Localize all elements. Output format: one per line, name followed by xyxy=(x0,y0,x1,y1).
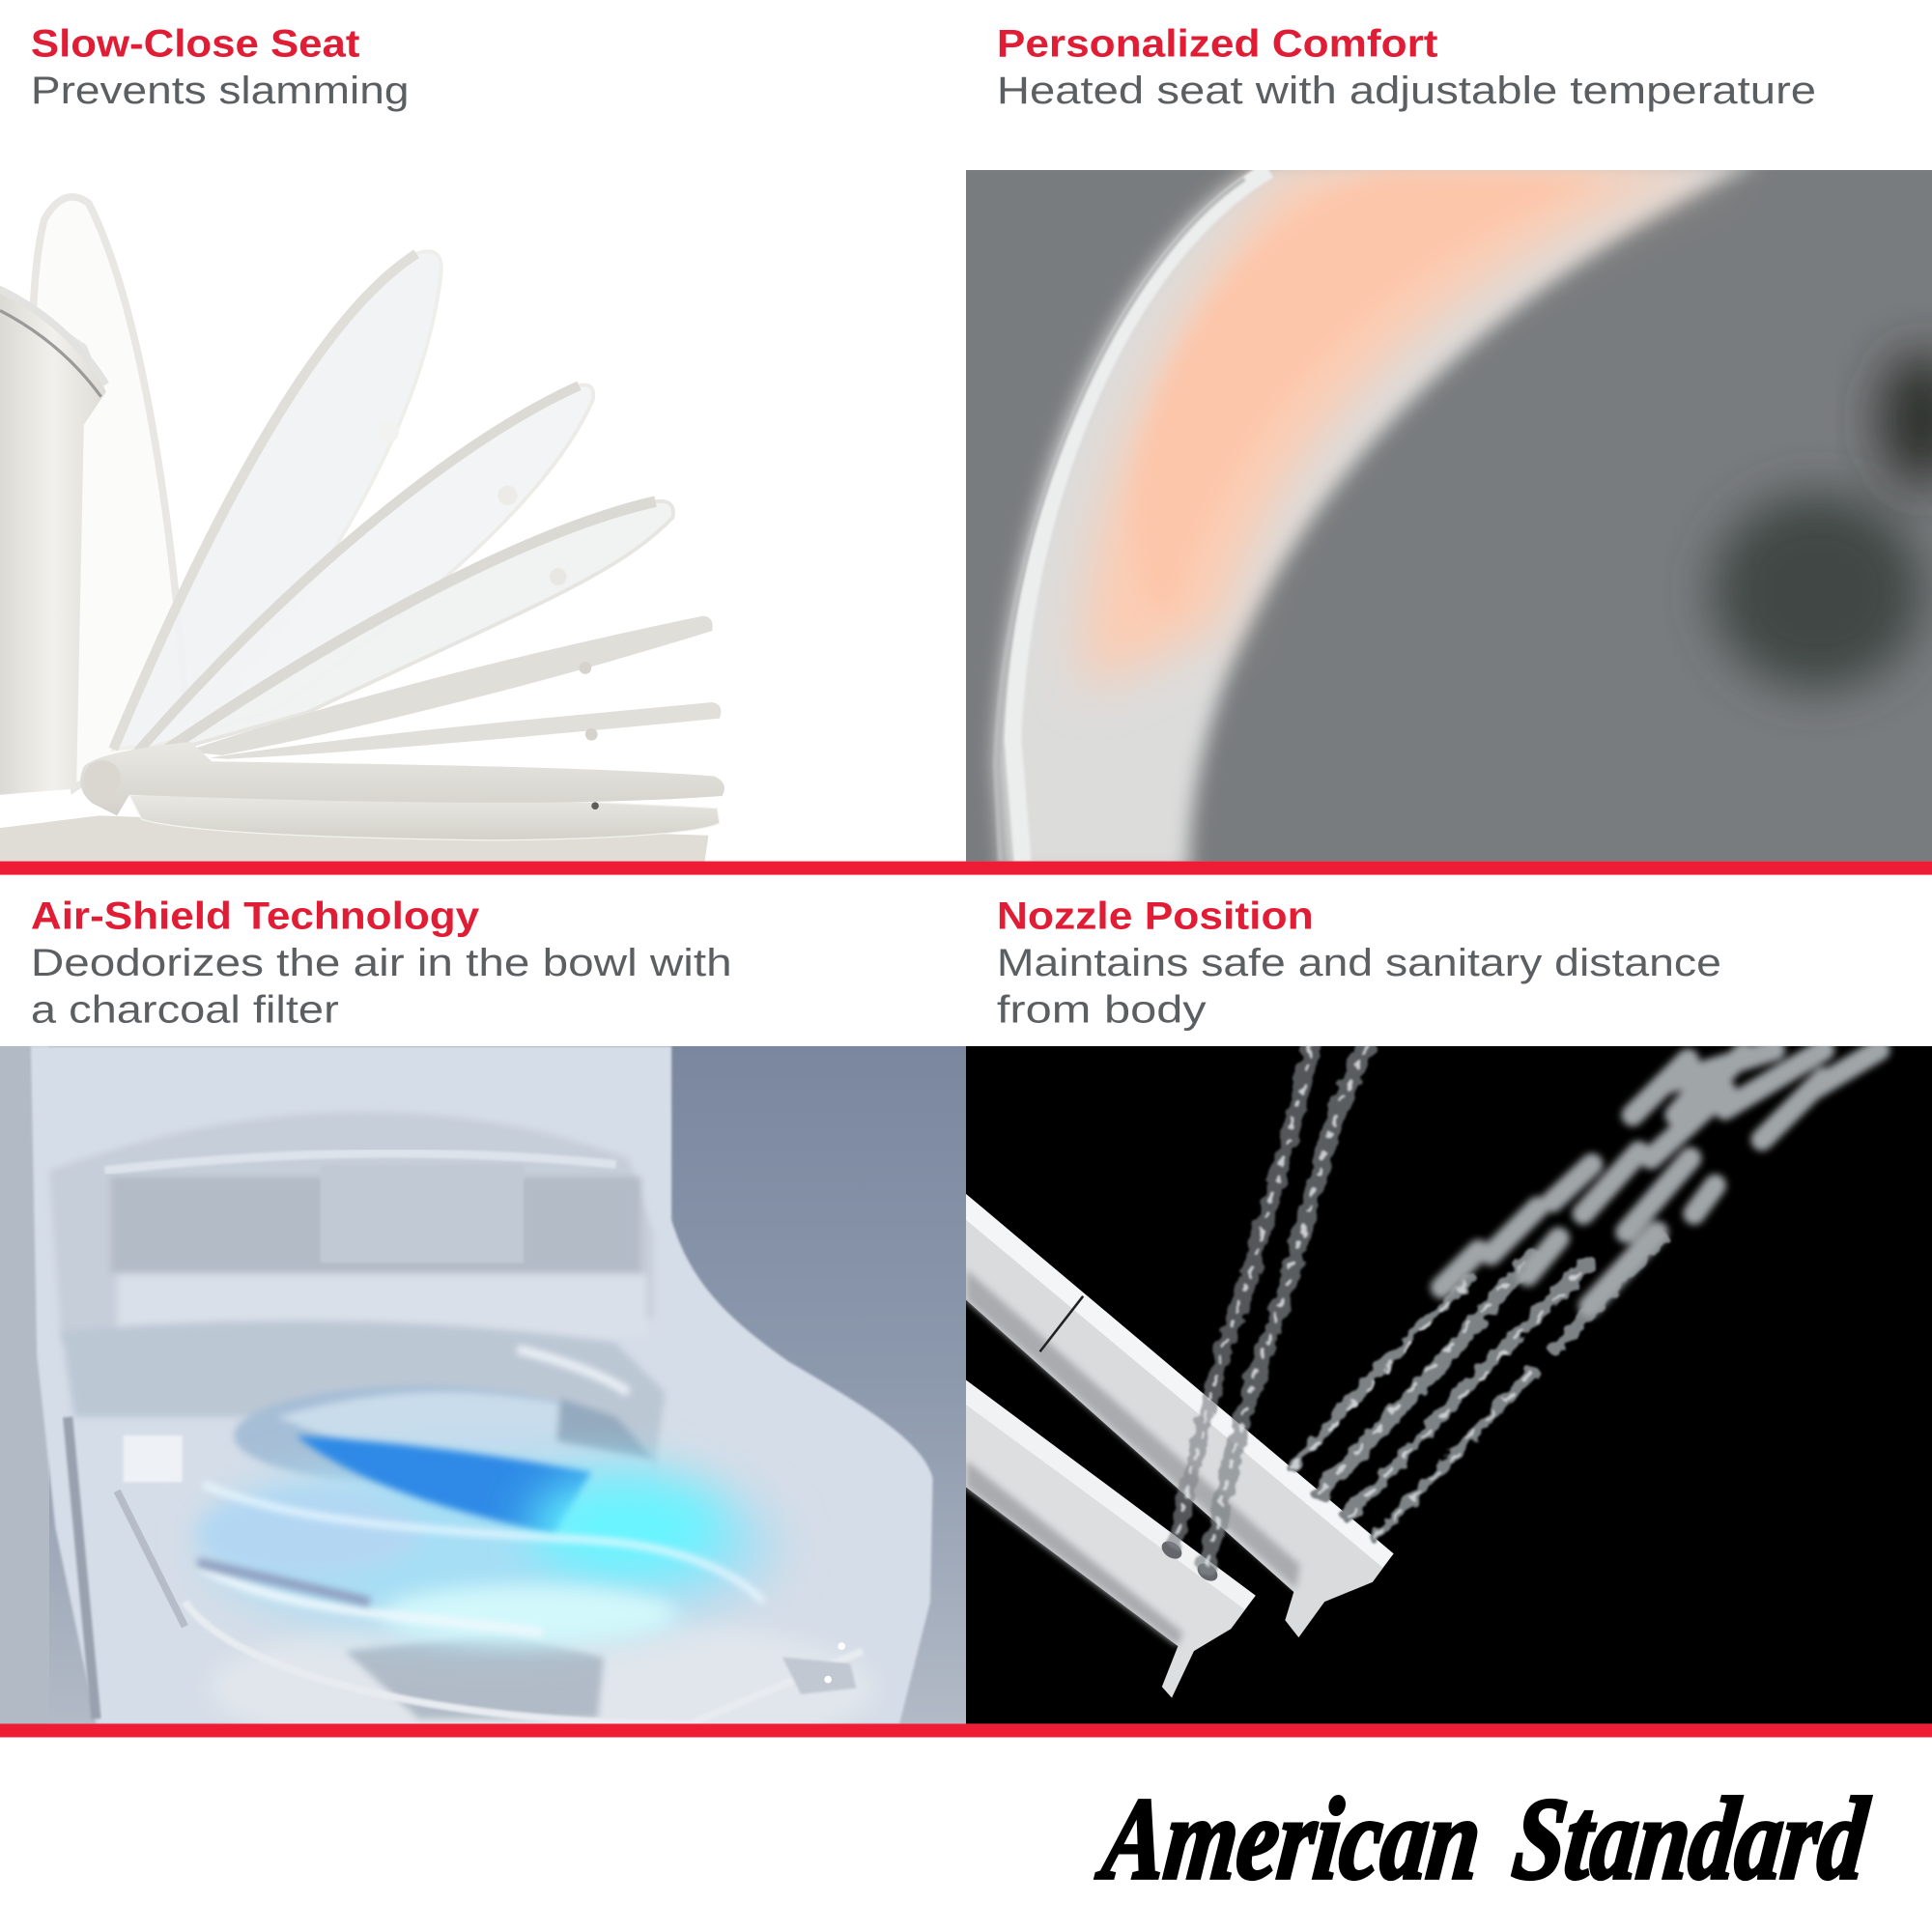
lower nozzle xyxy=(966,1380,1256,1698)
panel: personalized comfort xyxy=(966,23,1932,875)
image: air shield cutaway xyxy=(0,1046,966,1762)
text: from body: from body xyxy=(997,989,1207,1032)
logo: American Standard xyxy=(1092,1775,1874,1904)
heading: Nozzle Position: Nozzle Position xyxy=(997,895,1314,938)
image: heated seat closeup xyxy=(966,160,1932,875)
text: prevents slamming: Prevents slamming xyxy=(31,70,409,112)
text: heated seat: Heated seat with adjustable temperature xyxy=(997,70,1816,112)
text: maintains distance: Maintains safe and sanitary distance xyxy=(997,942,1721,984)
logo: American Standard: American xyxy=(1092,1775,1487,1904)
text: charcoal filter: a charcoal filter xyxy=(31,989,339,1032)
panel: nozzle position xyxy=(966,895,1932,1723)
heading: Slow-Close Seat: Slow-Close Seat xyxy=(31,23,359,66)
image: seat closing sequence xyxy=(0,197,724,862)
water streams xyxy=(1176,1046,1879,1566)
text: deodorizes: Deodorizes the air in the bowl with xyxy=(31,942,732,984)
divider bar top xyxy=(0,862,1932,875)
image: nozzles and water xyxy=(966,1046,1932,1723)
panel: slow-close seat xyxy=(0,23,724,862)
panel: air-shield technology xyxy=(0,895,966,1762)
heading: Air-Shield Technology: Air-Shield Technology xyxy=(31,895,479,938)
upper nozzle xyxy=(966,1194,1394,1637)
heading: Personalized Comfort: Personalized Comfort xyxy=(997,23,1438,66)
divider bar bottom xyxy=(0,1723,1932,1737)
